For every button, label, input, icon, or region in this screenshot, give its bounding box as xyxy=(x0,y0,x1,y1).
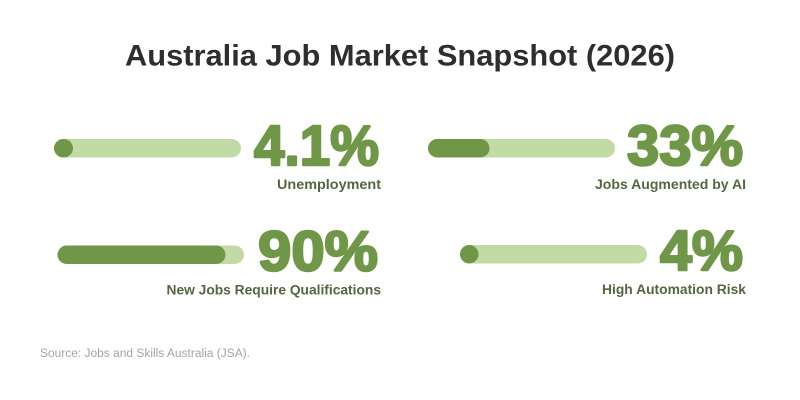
source note: Source: Jobs and Skills Australia (JSA). xyxy=(40,348,250,360)
value: 4.1%: 4.1% xyxy=(254,114,379,178)
title: Australia Job Market Snapshot (2026) xyxy=(125,40,675,72)
label: high automation risk: High Automation Risk xyxy=(602,282,747,297)
panel: unemployment xyxy=(54,114,382,192)
panel: jobs augmented by AI xyxy=(428,114,746,192)
label: new jobs require qualifications: New Jobs Require Qualifications xyxy=(166,282,381,298)
bar: augmented 33% xyxy=(428,139,615,158)
value: 90%: 90% xyxy=(258,220,378,284)
bar: unemployment 4.1% xyxy=(54,139,241,158)
panel: new jobs require qualifications xyxy=(58,220,381,298)
label: jobs augmented by AI: Jobs Augmented by AI xyxy=(595,177,746,192)
bar: qualifications 90% xyxy=(58,246,244,264)
label: unemployment: Unemployment xyxy=(277,177,382,192)
value: 4%: 4% xyxy=(660,219,743,283)
bar: automation 4% xyxy=(460,245,647,264)
panel: high automation risk xyxy=(460,219,747,297)
value: 33%: 33% xyxy=(627,114,743,178)
